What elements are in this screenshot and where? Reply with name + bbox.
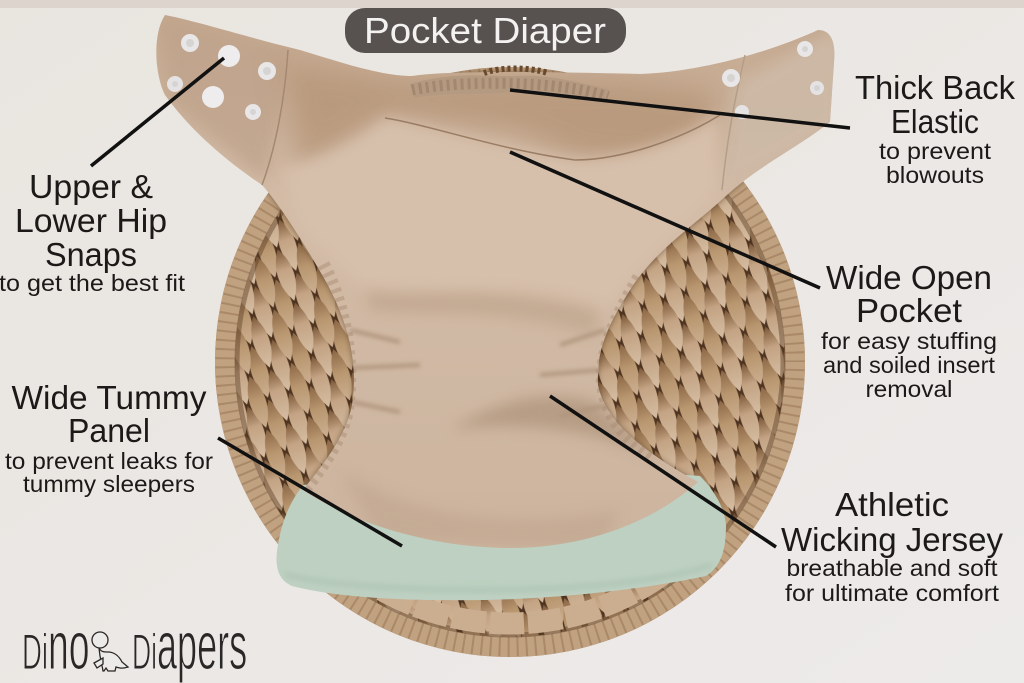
fold shadows	[365, 290, 600, 335]
label: wide tummy panel: tummy sleepers	[23, 471, 195, 497]
right wing seam	[722, 55, 745, 190]
arrow: tummy panel	[218, 438, 402, 546]
label: wide open pocket: Wide Open	[826, 259, 992, 296]
label: athletic wicking jersey	[781, 486, 1003, 606]
diaper body	[156, 15, 840, 548]
left wing seam	[262, 50, 288, 185]
logo: Dino Diapers	[22, 607, 247, 683]
label: upper and lower hip snaps: Upper &	[29, 168, 153, 205]
arrow: wicking jersey	[550, 396, 776, 547]
pocket opening edge	[385, 115, 720, 160]
label: wide tummy panel: Panel	[68, 412, 150, 449]
pocket flap highlight	[288, 114, 722, 245]
title pill: Pocket Diaper	[364, 10, 606, 51]
bottom braid	[350, 569, 670, 624]
label: thick back elastic: to prevent	[879, 138, 992, 164]
label: wide open pocket: for easy stuffing	[821, 328, 997, 354]
label: upper and lower hip snaps: Snaps	[45, 236, 137, 273]
label: upper and lower hip snaps: Lower Hip	[15, 202, 167, 239]
diaper shadow on mat	[266, 68, 745, 485]
label: thick back elastic: blowouts	[886, 162, 984, 188]
label: upper and lower hip snaps: to get the best fit	[0, 270, 186, 296]
label: thick back elastic	[855, 69, 1015, 188]
logo: Dino Diapers: Diapers	[132, 608, 247, 683]
snaps: hip snaps	[167, 34, 824, 120]
label: thick back elastic: Thick Back	[855, 69, 1015, 106]
green tummy panel	[277, 474, 726, 600]
label: wide tummy panel: Wide Tummy	[12, 379, 207, 416]
label: wide open pocket: Pocket	[856, 292, 962, 329]
label: upper and lower hip snaps	[0, 168, 186, 296]
label: athletic wicking jersey: for ultimate comfort	[785, 580, 1000, 606]
arrow: open pocket	[510, 152, 820, 288]
woven placemat	[215, 67, 805, 657]
label: wide open pocket	[821, 259, 997, 402]
label: wide open pocket: and soiled insert	[823, 352, 996, 378]
label: wide tummy panel: to prevent leaks for	[5, 448, 213, 474]
wing shading right	[734, 34, 834, 144]
label: athletic wicking jersey: Athletic	[835, 486, 949, 523]
back elastic	[410, 68, 610, 105]
logo: Dino Diapers: Dino	[22, 607, 90, 683]
right gathered elastic	[604, 278, 652, 456]
wrinkles at leg gathers	[350, 330, 608, 416]
label: thick back elastic: Elastic	[891, 103, 979, 140]
label: wide open pocket: removal	[866, 376, 952, 402]
wing shading left	[174, 56, 275, 174]
label: wide tummy panel	[5, 379, 213, 497]
interior shadow near back	[280, 60, 720, 170]
arrow: hip snaps	[91, 58, 224, 166]
label: athletic wicking jersey: breathable and soft	[786, 555, 998, 581]
arrow: back elastic	[510, 90, 850, 128]
icon: dinosaur	[92, 632, 128, 671]
left gathered elastic	[304, 265, 348, 488]
label: athletic wicking jersey: Wicking Jersey	[781, 521, 1003, 558]
